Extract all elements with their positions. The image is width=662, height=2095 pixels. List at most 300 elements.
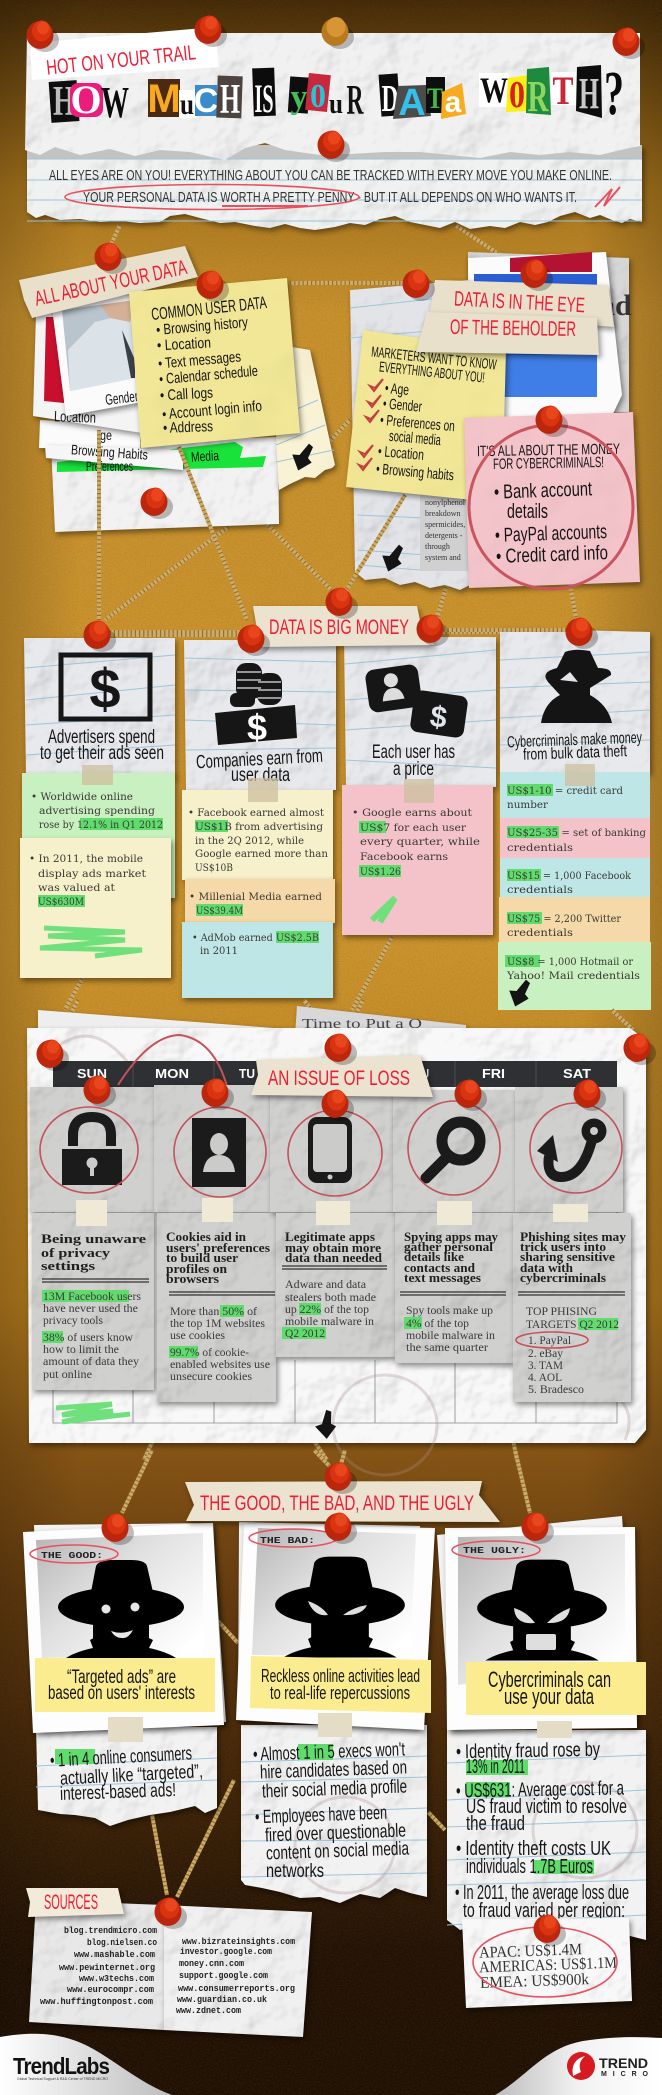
icon: orange push pin — [322, 17, 354, 49]
column: each user has a price — [344, 637, 496, 787]
source list right: www.bizrateinsights.com — [182, 1936, 295, 1947]
sticky: marketers: • Preferences on — [379, 412, 456, 435]
icon: push pin — [36, 1040, 69, 1071]
footer: trendlabs logo: Global Technical Support & R&D Center of TREND MICRO — [17, 2076, 108, 2081]
icon: user card — [192, 1118, 246, 1187]
source list right — [176, 1936, 295, 2016]
card: spying apps: details like — [404, 1249, 464, 1264]
card: phishing sites: TARGETS Q2 2012 — [526, 1317, 619, 1331]
tape: of the beholder — [416, 312, 599, 355]
card: cookies: unsecure cookies — [170, 1369, 252, 1383]
icon: push pin — [84, 620, 116, 652]
sticky: cybercriminals: details — [507, 501, 548, 523]
title: ransom note letters: D — [382, 78, 398, 120]
tape: hot on your trail — [30, 27, 219, 80]
icon: fish hook — [537, 1118, 606, 1177]
white sheets: profile labels — [39, 420, 183, 474]
card: spying apps: mobile malware in — [406, 1328, 495, 1342]
source list left: www.huffingtonpost.com — [40, 1996, 153, 2007]
card: cookies: More than 50% of — [170, 1304, 257, 1318]
panel: data is big money — [20, 606, 651, 1010]
title: ransom note letters: T — [427, 82, 443, 115]
card: spying apps: 4% of the top — [406, 1316, 469, 1330]
icon: push pin — [102, 1514, 134, 1545]
card: privacy settings: Being unaware — [41, 1231, 146, 1246]
lined gray paper: through — [425, 542, 450, 551]
title: ransom note letters: 0 — [509, 74, 525, 116]
weekday bar: TU — [239, 1067, 255, 1081]
card: cookies — [154, 1085, 276, 1402]
icon: push pin — [324, 1462, 357, 1494]
source list right: www.guardian.co.uk — [177, 1994, 267, 2005]
card: phishing sites — [513, 1087, 631, 1402]
weekday bar: U — [422, 1067, 429, 1081]
card: spying apps: Spy tools make up — [406, 1303, 493, 1317]
column: advertisers — [24, 638, 175, 777]
note column 1: US$630M — [38, 896, 84, 908]
polaroid: bad: to real-life repercussions — [270, 1683, 410, 1703]
note column 3: US$1.26 — [360, 866, 401, 878]
sticky: marketers: • Browsing habits — [375, 461, 455, 484]
icon: push pin — [194, 16, 227, 47]
note column 3: • Google earns about — [352, 807, 473, 819]
icon: push pin — [238, 624, 270, 656]
source list left — [40, 1925, 157, 2007]
note column 2 — [182, 778, 335, 998]
lined note: good: actually like “targeted”, — [60, 1761, 203, 1790]
source list right: www.consumerreports.org — [178, 1983, 295, 1994]
card: legitimate apps: up 22% of the top — [285, 1302, 369, 1316]
tape: hot on your trail: HOT ON YOUR TRAIL — [45, 41, 197, 80]
callout: regional fraud loss — [462, 1918, 632, 2008]
card: cookies: use cookies — [170, 1328, 225, 1342]
icon: push pin — [402, 270, 435, 301]
icon: push pin — [26, 20, 59, 52]
card: phishing sites: 2. eBay — [528, 1346, 563, 1360]
note column 2: in 2011 — [200, 945, 238, 957]
note column 4: credentials — [507, 927, 573, 939]
note column 1: • Worldwide online — [31, 791, 133, 803]
weekday bar: SAT — [563, 1067, 591, 1081]
title: ransom note letters: 0 — [310, 78, 326, 115]
note column 1: • In 2011, the mobile — [29, 853, 143, 865]
sticky: marketers — [346, 330, 506, 503]
sticky: common user data: COMMON USER DATA — [150, 293, 268, 324]
note column 4: US$15 = 1,000 Facebook — [507, 870, 632, 882]
lined note: good: interest-based ads! — [60, 1780, 176, 1805]
note column 2: • Millenial Media earned — [189, 891, 322, 903]
source list right: money.cnn.com — [179, 1958, 244, 1969]
card: legitimate apps — [270, 1087, 395, 1357]
card: cookies: to build user — [166, 1250, 238, 1265]
title: ransom note letters: a — [445, 86, 462, 119]
card: cookies: users' preferences — [166, 1240, 270, 1255]
callout: regional fraud loss: APAC: US$1.4M — [479, 1941, 582, 1962]
rope over paper — [342, 495, 405, 597]
tape: data is in the eye — [430, 280, 614, 327]
sticky: common user data — [129, 278, 300, 448]
panel: the ugly — [437, 1516, 646, 2008]
note column 4: number — [507, 799, 549, 811]
lined note: bad: content on social media — [266, 1838, 410, 1864]
icon: push pin — [574, 1080, 606, 1111]
lined note: bad: networks — [266, 1861, 324, 1882]
polaroid: bad: Reckless online activities lead — [261, 1666, 420, 1686]
icon: push pin — [318, 130, 350, 162]
footer: trend micro logo — [495, 2037, 662, 2095]
back calendar sheets: Time to Put a Q — [302, 1017, 422, 1032]
sticky: marketers: • Gender — [382, 395, 423, 416]
sticky: marketers: social media — [388, 428, 442, 449]
note column 2: Google earned more than — [195, 848, 328, 860]
sticky: marketers: MARKETERS WANT TO KNOW — [370, 344, 498, 374]
polaroid: bad: THE BAD: — [260, 1535, 315, 1546]
note column 4: US$75 = 2,200 Twitter — [507, 913, 622, 925]
polaroid: gender with photo — [52, 292, 143, 416]
source list left: www.w3techs.com — [79, 1973, 154, 1984]
note column 4: Yahoo! Mail credentials — [506, 970, 640, 982]
title: ransom note letters: u — [180, 88, 194, 121]
polaroid: good: THE GOOD: — [41, 1550, 103, 1561]
note column 2: US$39.4M — [196, 905, 243, 917]
icon: push pin — [202, 1078, 234, 1110]
panel: sources — [26, 1888, 312, 2037]
note column 3: Facebook earns — [360, 851, 448, 863]
title: ransom note letters: H — [220, 77, 240, 123]
sticky: common user data: • Calendar schedule — [158, 363, 259, 388]
note column 4: US$25-35 = set of banking — [507, 827, 646, 839]
source list left: www.eurocompr.com — [67, 1984, 154, 1995]
title: ransom note letters: R — [346, 78, 364, 124]
weekday bar: MON — [155, 1067, 189, 1081]
red scribble arc — [118, 1035, 228, 1090]
source list left: www.mashable.com — [74, 1949, 155, 1960]
title: ransom note letters: A — [398, 82, 426, 124]
note column 1: was valued at — [38, 882, 116, 894]
lined gray paper: system and — [425, 553, 461, 562]
column: companies — [184, 640, 336, 790]
panel: the bad — [236, 1522, 435, 1903]
title: ransom note letters: T — [552, 68, 574, 113]
panel: an issue of loss — [27, 1006, 646, 1475]
card: privacy settings: 38% of users know — [43, 1330, 133, 1344]
title: ransom note letters: u — [329, 89, 343, 120]
newspaper back sheet: ad — [600, 289, 632, 322]
lined note: bad: hire candidates based on — [260, 1757, 407, 1784]
tape: all about your data — [19, 246, 198, 318]
polaroid: gender with photo: Gender — [104, 388, 139, 409]
white sheets: profile labels: Preferences — [86, 458, 133, 474]
note column 2: • Facebook earned almost — [188, 807, 325, 819]
card: privacy settings — [30, 1087, 154, 1390]
lined gray paper: nonylphenol — [425, 498, 466, 507]
tape: an issue of loss: AN ISSUE OF LOSS — [268, 1067, 410, 1090]
polaroid: good: “Targeted ads” are — [67, 1667, 176, 1688]
title: ransom note letters: O — [70, 77, 102, 122]
column: companies: $ — [247, 707, 267, 748]
card: spying apps: text messages — [404, 1270, 481, 1285]
column: each user has a price: a price — [393, 759, 434, 780]
scribble and arrow on calendar — [56, 1404, 337, 1440]
icon: push pin — [326, 588, 358, 619]
panel: the good — [23, 1523, 226, 1826]
card: legitimate apps: may obtain more — [285, 1240, 381, 1255]
lined gray paper: detergents - — [425, 531, 463, 540]
tape: all about your data: ALL ABOUT YOUR DATA — [33, 256, 189, 311]
polaroid blue photo — [468, 252, 622, 420]
white sheets: profile labels: Browsing Habits — [71, 441, 148, 463]
title: ransom note letters: ? — [604, 60, 624, 128]
column: companies: user data — [231, 765, 290, 786]
column: advertisers: $ — [89, 657, 121, 720]
card: privacy settings: amount of data they — [43, 1354, 139, 1368]
card: privacy settings: 13M Facebook users — [43, 1289, 141, 1303]
card: spying apps: contacts and — [404, 1260, 476, 1275]
note column 1: rose by 12.1% in Q1 2012 — [39, 819, 163, 831]
footer: trend micro logo: MICRO — [601, 2071, 649, 2078]
rope corner — [55, 1073, 72, 1087]
card: cookies: browsers — [166, 1271, 219, 1286]
lined note: bad — [241, 1725, 427, 1903]
sticky: common user data: • Text messages — [157, 348, 242, 373]
note column 4 — [498, 764, 651, 1010]
icon: push pin — [536, 406, 568, 437]
callout: regional fraud loss: AMERICAS: US$1.1M — [479, 1955, 617, 1976]
note column 4: US$8 = 1,000 Hotmail or — [507, 956, 634, 968]
source list right: support.google.com — [179, 1970, 268, 1981]
icon: push pin — [94, 242, 127, 274]
card: phishing sites: trick users into — [520, 1239, 606, 1254]
sticky: marketers: • Location — [377, 443, 425, 464]
newspaper back sheet — [468, 252, 632, 412]
note column 4: credentials — [507, 884, 573, 896]
note column 4: credentials — [507, 842, 573, 854]
white paper with green highlights — [51, 437, 279, 532]
title: ransom note letters: W — [480, 70, 508, 110]
card: legitimate apps: Adware and data — [285, 1277, 367, 1291]
lined note: bad: • Almost 1 in 5 execs won't — [253, 1739, 406, 1766]
tape: data is big money — [253, 606, 435, 647]
icon: push pin — [534, 1914, 566, 1946]
sticky: common user data: • Account login info — [161, 398, 263, 423]
note column 1: advertising spending — [39, 805, 155, 817]
white sheets: profile labels: ge — [100, 427, 112, 443]
footer: trendlabs logo: TrendLabs — [13, 2053, 109, 2079]
note column 1 — [20, 765, 175, 978]
card: legitimate apps: Legitimate apps — [285, 1229, 375, 1244]
column: each user has a price: Each user has — [372, 742, 455, 763]
icon: push pin — [84, 1076, 116, 1107]
source list left: blog.nielsen.co — [87, 1937, 157, 1948]
lined note: ugly: 13% in 2011 — [466, 1756, 525, 1778]
source list right: investor.google.com — [180, 1946, 272, 1957]
card: phishing sites: 3. TAM — [528, 1358, 563, 1372]
ropes lower section — [122, 1450, 530, 1897]
column: advertisers: Advertisers spend — [48, 727, 155, 748]
footer: trendlabs logo — [0, 2034, 172, 2095]
polaroid: ugly: use your data — [504, 1684, 595, 1709]
note column 3 — [342, 779, 493, 935]
ropes over panel — [99, 430, 247, 620]
tape: the good, the bad, and the ugly: THE GOOD, THE BAD, AND THE UGLY — [200, 1492, 474, 1515]
card: phishing sites: sharing sensitive — [520, 1249, 615, 1264]
card: cookies: enabled websites use — [170, 1357, 270, 1371]
note column 3: US$7 for each user — [360, 822, 467, 834]
sticky: cybercriminals: • Bank account — [494, 478, 593, 504]
icon: push pin — [522, 1512, 554, 1544]
card: legitimate apps: Q2 2012 — [285, 1326, 325, 1340]
panel: header paper — [25, 27, 642, 230]
footer: trend micro logo: TREND — [599, 2055, 648, 2071]
card: phishing sites: data with — [520, 1260, 574, 1275]
sticky: common user data: • Call logs — [160, 385, 213, 404]
lined gray paper: breakdown — [425, 509, 461, 518]
card: privacy settings: have never used the — [43, 1301, 138, 1315]
polaroid: ugly: THE UGLY: — [463, 1545, 526, 1556]
card: spying apps: Spying apps may — [404, 1229, 498, 1244]
title: ransom note letters: y — [290, 79, 308, 116]
polaroid: location: Location — [54, 408, 96, 427]
source list left: blog.trendmicro.com — [64, 1925, 157, 1936]
lined lower paper — [27, 145, 642, 230]
card: phishing sites: Phishing sites may — [520, 1229, 627, 1244]
tape: of the beholder: OF THE BEHOLDER — [450, 316, 576, 341]
white paper with green highlights: Media — [191, 447, 220, 465]
title: ransom note letters: IS — [254, 76, 274, 121]
card: spying apps: the same quarter — [406, 1340, 488, 1354]
lined note: bad: their social media profile — [262, 1776, 407, 1803]
polaroid: good: based on users' interests — [48, 1683, 195, 1704]
sticky: cybercriminals: FOR CYBERCRIMINALS! — [493, 454, 604, 473]
lined note: ugly: individuals 1.7B Euros — [466, 1856, 593, 1878]
rope: pin line — [97, 630, 579, 635]
note column 1: display ads market — [38, 868, 147, 880]
icon: push pin — [566, 618, 598, 649]
icon: push pin — [322, 1090, 354, 1121]
icon: push pin — [324, 1034, 357, 1065]
tape: the good, the bad, and the ugly — [185, 1481, 500, 1522]
weekday bar — [53, 1061, 617, 1087]
icon: push pin — [196, 270, 229, 302]
card: legitimate apps: mobile malware in — [285, 1314, 374, 1328]
source list right: www.zdnet.com — [176, 2005, 241, 2016]
note column 3: every quarter, while — [360, 836, 480, 848]
lined note: ugly — [447, 1730, 646, 1940]
title: ransom note letters: W — [101, 78, 129, 127]
polaroid: ugly — [437, 1516, 646, 1738]
lined note: ugly: • Identity theft costs UK — [456, 1838, 611, 1860]
title: ransom note letters: H — [579, 69, 599, 118]
lined gray paper — [350, 280, 470, 590]
sticky: common user data: • Browsing history — [155, 314, 249, 339]
ropes behind calendar — [55, 1000, 633, 1460]
icon: magnifier — [426, 1122, 480, 1178]
lined note: good — [36, 1727, 217, 1826]
polaroid: location — [33, 313, 142, 433]
calendar page — [27, 1028, 646, 1475]
card: cookies: the top 1M websites — [170, 1316, 265, 1330]
card: cookies: profiles on — [166, 1261, 228, 1276]
intro text — [49, 167, 620, 210]
sticky: marketers: EVERYTHING ABOUT YOU! — [378, 359, 485, 386]
card: cookies: 99.7% of cookie- — [170, 1345, 249, 1359]
back calendar sheets — [38, 1006, 466, 1400]
card: cookies: Cookies aid in — [166, 1229, 247, 1244]
icon: smartphone — [308, 1117, 352, 1183]
lined note: ugly: • Identity fraud rose by — [456, 1739, 600, 1763]
lined note: bad: fired over questionable — [265, 1821, 406, 1846]
column: cybercriminals — [500, 628, 650, 773]
lined note: good: • 1 in 4 online consumers — [50, 1743, 192, 1772]
lined note: bad: • Employees have been — [255, 1803, 387, 1828]
panel: data is in the eye of the beholder — [342, 252, 640, 597]
card: spying apps: gather personal — [404, 1239, 493, 1254]
icon: push pin — [416, 614, 449, 646]
title: ransom note letters: M — [147, 77, 181, 121]
card: phishing sites: TOP PHISING — [526, 1304, 597, 1318]
note column 2: US$1B from advertising — [195, 821, 323, 833]
note column 4: US$1-10 = credit card — [507, 785, 623, 797]
column: cybercriminals: from bulk data theft — [523, 743, 628, 764]
card: privacy settings: how to limit the — [43, 1342, 119, 1356]
sticky: common user data: • Address — [163, 418, 213, 437]
callout: regional fraud loss: EMEA: US$900k — [480, 1971, 589, 1992]
icon: push pin — [324, 1512, 357, 1544]
tape: data is in the eye: DATA IS IN THE EYE — [453, 288, 585, 317]
icon: push pin — [454, 1080, 487, 1111]
weekday bar: FRI — [482, 1067, 505, 1081]
icon: push pin — [140, 488, 173, 519]
card: privacy settings: settings — [41, 1258, 95, 1273]
icon: push pin — [612, 28, 645, 59]
note column 2: US$10B — [195, 862, 233, 874]
card: phishing sites: cybercriminals — [520, 1270, 606, 1285]
column: each user has a price: $ — [428, 700, 449, 735]
title: ransom note letters: H — [53, 79, 75, 125]
ivory lined paper — [276, 345, 335, 490]
torn upper paper — [25, 33, 640, 160]
card: phishing sites: 1. PayPal — [528, 1333, 572, 1347]
note column 2: • AdMob earned US$2.5B — [192, 932, 319, 944]
title: ransom note letters: R — [528, 72, 549, 121]
ropes below big money notes — [65, 937, 392, 1010]
card: spying apps — [393, 1090, 515, 1363]
polaroid: bad — [236, 1522, 435, 1737]
tape: an issue of loss — [251, 1055, 433, 1097]
weekday bar: SUN — [77, 1067, 107, 1081]
card: legitimate apps: stealers both made — [285, 1290, 376, 1304]
panel: all about your data — [19, 246, 335, 620]
card: privacy settings: put online — [43, 1367, 92, 1381]
sticky: cybercriminals: • Credit card info — [496, 542, 608, 568]
ropes behind top section — [97, 225, 579, 632]
lined gray paper: spermicides, — [425, 520, 465, 529]
title: ransom note letters: C — [194, 82, 218, 120]
icon: push pin — [520, 260, 553, 291]
source list left: www.pewinternet.org — [59, 1962, 155, 1973]
icon: padlock — [62, 1117, 122, 1185]
icon: push pin — [154, 1898, 187, 1929]
sticky: cybercriminals: • PayPal accounts — [495, 521, 607, 547]
sticky: common user data: • Location — [157, 335, 211, 354]
sticky: marketers: • Age — [384, 380, 410, 399]
card: phishing sites: 5. Bradesco — [528, 1382, 584, 1396]
title: ransom note letters — [49, 60, 624, 128]
sticky: cybercriminals — [464, 412, 640, 589]
lined note: ugly: the fraud — [466, 1813, 525, 1835]
card: privacy settings: privacy tools — [43, 1313, 103, 1327]
polaroid: good — [23, 1523, 226, 1742]
